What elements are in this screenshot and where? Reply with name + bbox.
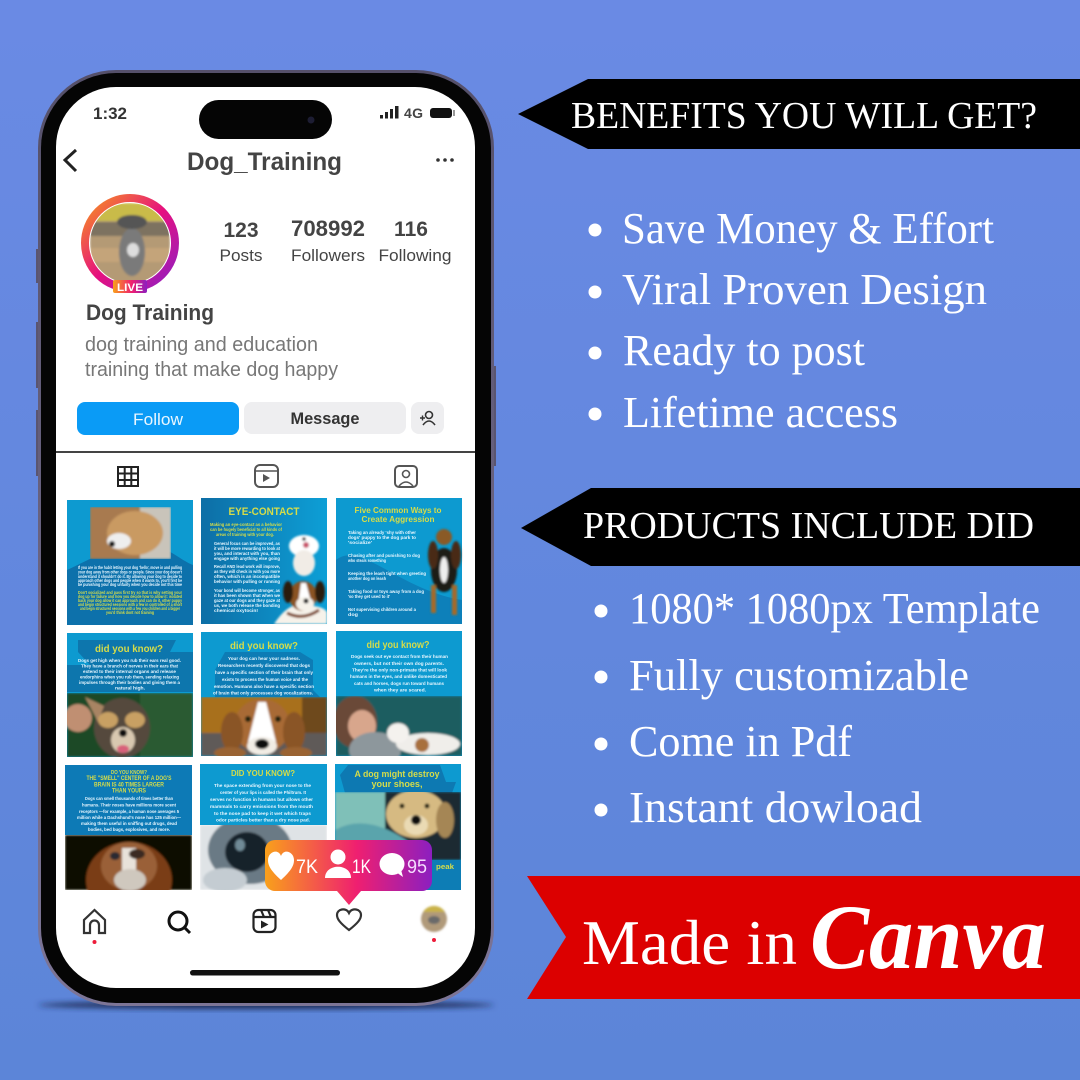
profile avatar with live ring — [85, 198, 175, 294]
post: eye-contact: you, and interact with you, than — [214, 551, 280, 556]
post: eye-contact: can be hugely beneficial to all kinds of — [210, 527, 283, 532]
profile buttons: Follow — [133, 410, 184, 429]
post: smell centre: BRAIN IS 40 TIMES LARGER — [94, 782, 165, 788]
post: dog portrait with text: and begin structured sessions with a few you children and a bigger — [80, 606, 180, 611]
post: did you know, eye close-up — [200, 764, 327, 892]
engagement notification bubble — [265, 840, 432, 905]
post: eye-contact: as they will check in with you more — [214, 569, 281, 574]
post: five common ways: Chasing after and punishing to dog — [348, 553, 420, 558]
post: smell centre: Dogs can smell thousands of times better than — [85, 796, 173, 801]
post: did you know, beagle: of brain that only processes dog vocalizations. — [213, 690, 313, 696]
profile stats: 123 — [223, 219, 259, 242]
post: eye-contact: engage with anything else going — [214, 556, 280, 561]
profile header — [65, 148, 454, 176]
post: did you know, beagle: Researchers recently discovered that dogs — [218, 663, 311, 668]
post: did you know, eye close-up: to the nose pad to keep it wet which traps — [214, 811, 312, 816]
post: eye-contact: it has been shown that when we — [214, 593, 281, 598]
benefits list: Ready to post — [623, 326, 865, 375]
profile name and bio: training that make dog happy — [85, 359, 338, 381]
banner: made in canva: Made in — [582, 907, 797, 978]
post: eye-contact: often, which is an incompatible — [214, 574, 281, 579]
engagement notification bubble: 95 — [407, 857, 427, 878]
post: smell centre: humans. Their noses have millions more scent — [82, 802, 177, 808]
products list: Instant dowload — [629, 783, 922, 832]
profile divider — [56, 451, 475, 453]
profile stats — [220, 216, 452, 265]
post: did you know, beagle — [201, 632, 327, 759]
post: five common ways: dog — [348, 612, 359, 617]
banner: products — [521, 488, 1080, 566]
profile stats: 708992 — [291, 216, 365, 241]
products list: Come in Pdf — [629, 717, 852, 766]
post: five common ways: 'socialize' — [348, 540, 372, 545]
post: dog portrait with text: If you are in the habit letting your dog 'hello', move in and pulling — [78, 565, 182, 570]
live badge: LIVE — [117, 282, 143, 294]
banner: products: PRODUCTS INCLUDE DID — [583, 505, 1034, 547]
post: five common ways: who steals something — [347, 558, 386, 563]
post: five common ways: another dog on leash — [348, 576, 386, 581]
post: did you know, woman and dog: when they are scared. — [373, 688, 426, 692]
benefits list: Lifetime access — [623, 388, 898, 437]
post: dog portrait with text: dog up for failure and how you decide how to allow it: isolated — [78, 594, 182, 599]
post: smell centre: bodies, bed bugs, explosives, and more. — [88, 827, 170, 832]
post: destroy your shoes — [335, 764, 461, 890]
post: did you know, ear rub: impulses through their bodies and giving them a — [79, 680, 181, 685]
post: destroy your shoes: peak — [436, 864, 454, 871]
post: did you know, woman and dog: They're the only non-primate that will look — [352, 668, 448, 672]
status bar — [93, 100, 455, 139]
post: did you know, woman and dog: Dogs seek out eye contact from their human — [351, 654, 448, 659]
post: did you know, eye close-up: mammals to carry emissions from the mouth — [210, 804, 314, 809]
icon: brown and white dog — [274, 581, 327, 624]
post: smell centre: THE "SMELL" CENTER OF A DOG'S — [86, 776, 172, 782]
profile name and bio: Dog Training — [86, 300, 214, 325]
avatar — [421, 906, 447, 932]
icon: white dog — [289, 535, 319, 576]
icon: person — [325, 850, 351, 878]
post: did you know, beagle: exists to process the human voice and the — [222, 677, 309, 682]
post: destroy your shoes: your shoes, — [372, 779, 422, 789]
post: eye-contact: areas of training with your dog. — [216, 532, 274, 537]
post: did you know, ear rub: natural high. — [115, 686, 145, 690]
phone mockup — [36, 70, 496, 1009]
post: smell centre: million while a Dachshund's nose has 125 million— — [77, 815, 182, 820]
banner: made in canva: Canva — [810, 886, 1046, 988]
phone frame — [36, 70, 496, 1006]
post: eye-contact: EYE-CONTACT — [228, 506, 300, 518]
post: eye-contact: us, we both release the bonding — [214, 603, 280, 608]
post: dog portrait with text: your dog away from other dogs or people. Since your dog doesn't — [78, 570, 182, 574]
post: dog portrait with text: approach other dogs and people when it wants to, you'll first be — [78, 578, 183, 583]
profile stats: Posts — [220, 246, 262, 265]
post: did you know, woman and dog: owners, but not their own dog parents. — [354, 661, 444, 666]
post: did you know, woman and dog: did you know? — [366, 640, 430, 651]
status bar: 1:32 — [93, 104, 127, 123]
post: dog portrait with text: be punishing your dog unfairly when you decide not this time — [78, 582, 183, 587]
post: eye-contact — [201, 498, 327, 624]
post: destroy your shoes: A dog might destroy — [354, 769, 440, 779]
bottom navigation bar — [84, 906, 447, 944]
post: five common ways: Taking food or toys away from a dog — [348, 589, 424, 594]
products list — [594, 584, 1040, 832]
post: did you know, ear rub: Dogs get high when you rub their ears real good. — [78, 658, 181, 663]
products list: Fully customizable — [629, 651, 969, 700]
post: dog portrait with text: understand it shouldn't do it. By allowing your dog to decide to — [78, 574, 182, 579]
post: dog portrait with text: back your dog allow it can approach and can do it, other puppy — [78, 598, 183, 603]
post: eye-contact: it will be more rewarding to look at — [214, 546, 281, 551]
benefits list — [588, 204, 994, 437]
post: did you know, eye close-up: The space extending from your nose to the — [214, 783, 312, 788]
post: did you know, eye close-up: DID YOU KNOW? — [231, 768, 295, 778]
post: did you know, eye close-up: center of your lips is called the Philtrum. It — [220, 790, 307, 795]
post: did you know, eye close-up: odor particles better than a dry nose pad. — [216, 818, 310, 822]
post: five common ways: Taking an already 'shy with other — [348, 530, 416, 535]
banner: benefits: BENEFITS YOU WILL GET? — [571, 95, 1037, 137]
post: eye-contact: Recall AND lead work will improve, — [214, 564, 280, 569]
post: did you know, ear rub: did you know? — [95, 644, 163, 655]
post: eye-contact: General focus can be improved, as — [214, 541, 281, 546]
banner: made in canva — [527, 876, 1080, 999]
post: dog portrait with text: and begin structured sessions with a few in controlled of a short — [78, 602, 182, 607]
post: did you know, eye close-up: serves no function in humans but allows other — [210, 797, 313, 802]
post: did you know, beagle: did you know? — [230, 641, 298, 652]
post: five common ways: Not supervising children around a — [348, 607, 417, 612]
post: did you know, ear rub: They have a branch of nerves in their ears that — [81, 664, 179, 668]
tab icons — [118, 465, 417, 487]
post: did you know, woman and dog: humans in the eyes, and unlike domesticated — [350, 674, 447, 679]
post: did you know, ear rub: endorphins when you rub them, sending relaxing — [80, 674, 179, 680]
post: eye-contact: Making an eye-contact as a behavior — [210, 522, 282, 527]
icon: search — [169, 912, 190, 933]
post: dog portrait with text: you'd think dont not training — [106, 610, 154, 615]
phone shadow — [38, 1001, 494, 1009]
post: five common ways: Five Common Ways to — [354, 506, 442, 515]
benefits list: Save Money & Effort — [622, 204, 994, 253]
profile buttons: Message — [290, 409, 360, 428]
post: smell centre — [65, 765, 192, 890]
profile name and bio — [85, 300, 338, 381]
post: dog portrait with text: Don't socialized and pass first try so that is why setting your — [78, 590, 182, 595]
post: eye-contact: chemical oxytocin! — [214, 608, 258, 613]
icon: reels — [254, 910, 276, 932]
post: smell centre: DO YOU KNOW? — [111, 770, 147, 776]
post: five common ways — [336, 498, 462, 624]
post: dog portrait with text — [67, 500, 193, 625]
post: eye-contact: behavior with pulling or running — [214, 579, 280, 584]
post: five common ways: dogs' puppy to the dog park to — [348, 535, 416, 540]
post: five common ways: Keeping the leash tight when greeting — [348, 571, 426, 576]
profile name and bio: dog training and education — [85, 334, 318, 356]
engagement notification bubble: 7K — [296, 857, 318, 878]
profile stats: Following — [378, 246, 452, 265]
home indicator — [190, 970, 340, 976]
post: eye-contact: gaze at our dogs and they gaze at — [214, 598, 281, 603]
post: smell centre: THAN YOURS — [112, 788, 146, 794]
icon: home — [84, 910, 105, 933]
post: did you know, ear rub: extend to their internal organs and release — [83, 669, 177, 674]
post: smell centre: receptors —for example, a human nose averages 5 — [79, 809, 180, 814]
banner: benefits — [518, 79, 1080, 149]
status bar: 4G — [404, 105, 423, 121]
post grid — [64, 498, 462, 918]
post: did you know, ear rub — [64, 633, 193, 758]
post: five common ways: 'so they get used to it' — [348, 594, 390, 599]
icon: heart — [268, 852, 294, 880]
profile header: Dog_Training — [187, 148, 342, 176]
post: did you know, woman and dog — [336, 631, 462, 756]
icon: heart — [337, 909, 361, 930]
profile buttons — [77, 402, 444, 435]
post: five common ways: Create Aggression — [362, 515, 435, 524]
profile stats: 116 — [394, 218, 428, 241]
post: eye-contact: Your bond will become stronger, as — [214, 588, 281, 593]
post: did you know, woman and dog: cats and horses, dogs run toward humans — [354, 681, 445, 686]
products list: 1080* 1080px Template — [629, 584, 1040, 633]
engagement notification bubble: 1K — [352, 857, 371, 878]
post: did you know, beagle: emotion. Humans also have a specific section — [214, 684, 314, 689]
post: did you know, beagle: Your dog can hear your sadness. — [228, 656, 300, 661]
post: did you know, beagle: have a specific section of their brain that only — [215, 670, 314, 675]
icon: black and tan dog — [428, 529, 461, 615]
post: smell centre: making them useful in sniffing out drugs, dead — [81, 821, 177, 826]
profile stats: Followers — [291, 246, 365, 265]
icon: comment bubble — [380, 853, 404, 877]
benefits list: Viral Proven Design — [622, 265, 987, 314]
